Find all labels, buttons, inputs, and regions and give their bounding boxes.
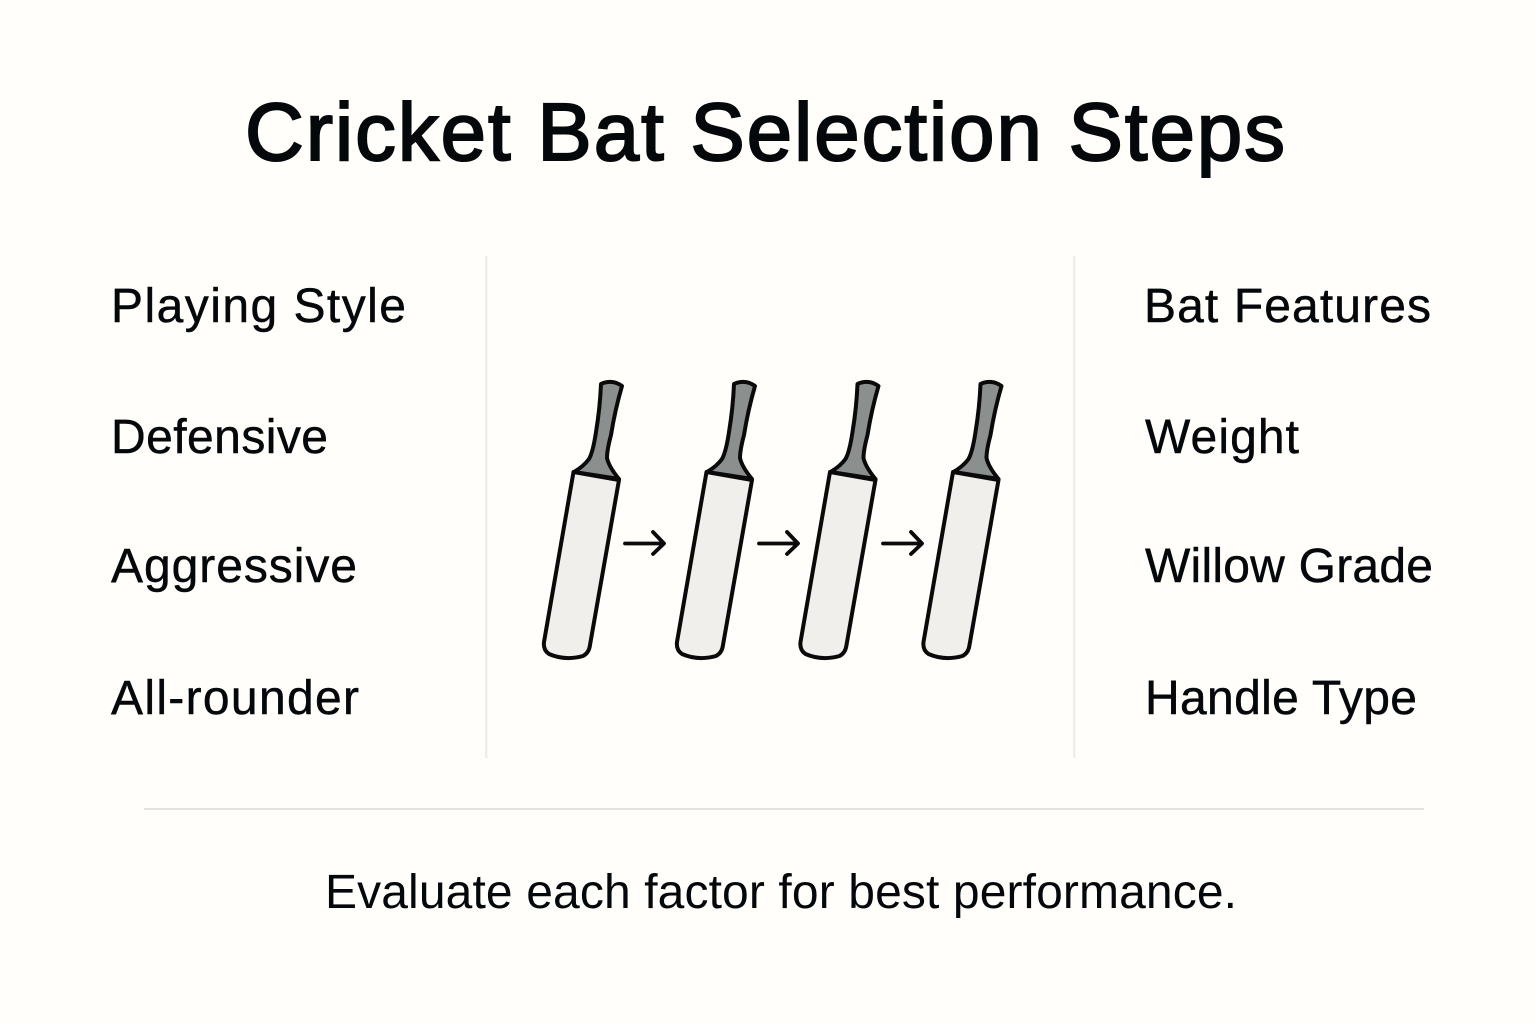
arrow 3 — [883, 532, 922, 554]
column: playing style — [111, 280, 406, 725]
arrow 2 — [759, 532, 798, 554]
label: handle type: Handle Type — [1145, 672, 1417, 725]
footer note: Evaluate each factor for best performance. — [325, 866, 1237, 919]
bat sequence — [544, 382, 1002, 658]
title: Cricket Bat Selection Steps — [245, 87, 1285, 178]
icon: bat 4 — [923, 382, 1002, 658]
label: willow grade: Willow Grade — [1145, 540, 1433, 593]
icon: bat 1 — [544, 382, 622, 658]
heading: playing style: Playing Style — [111, 280, 406, 333]
icon: bat 2 — [677, 382, 755, 658]
arrow 1 — [625, 532, 664, 554]
label: defensive: Defensive — [111, 411, 328, 464]
heading: bat features: Bat Features — [1144, 280, 1431, 333]
label: weight: Weight — [1145, 411, 1299, 464]
label: aggressive: Aggressive — [111, 540, 357, 593]
label: all-rounder: All-rounder — [111, 672, 359, 725]
icon: bat 3 — [800, 382, 878, 658]
column: bat features — [1144, 280, 1433, 725]
